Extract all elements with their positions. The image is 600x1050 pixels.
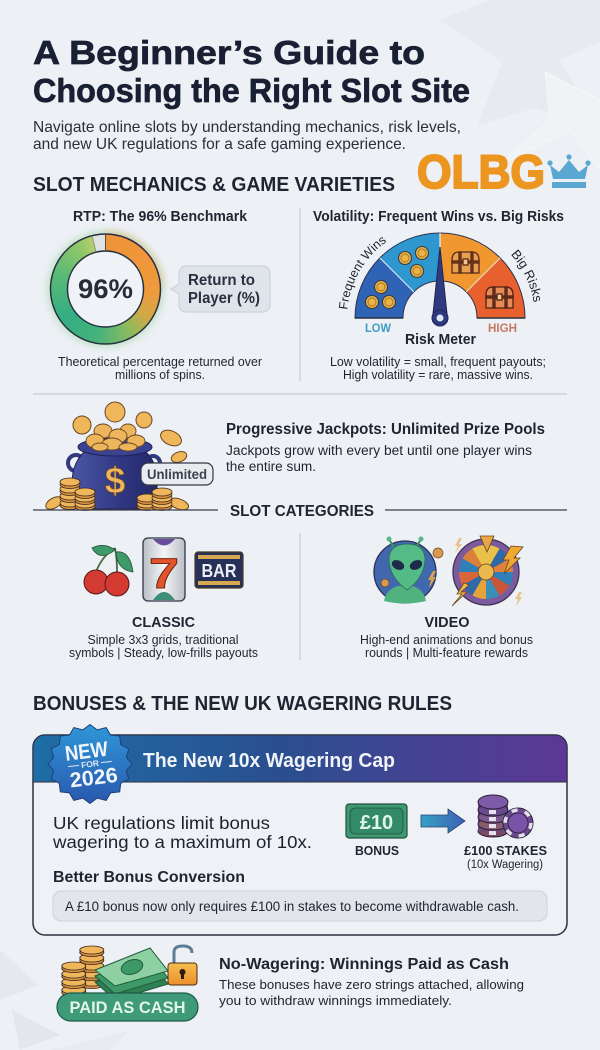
panel: wagering cap card <box>33 725 567 935</box>
video description: High-end animations and bonus <box>360 633 533 647</box>
icon: prize wheel <box>452 536 523 606</box>
regulation text: wagering to a maximum of 10x. <box>52 832 312 852</box>
subtitle <box>33 119 461 153</box>
banknotes <box>95 948 168 1000</box>
icon: coins low <box>366 280 396 308</box>
label: £100 stakes: £100 STAKES <box>464 843 547 858</box>
icon: coins medium <box>398 246 428 278</box>
panel: classic <box>69 538 258 660</box>
arrow <box>421 809 465 833</box>
icon: reel seven <box>143 538 185 601</box>
icon: bar: BAR <box>202 561 236 581</box>
title <box>33 34 470 109</box>
icon: £10 note: £10 <box>360 812 393 834</box>
RTP heading: RTP: The 96% Benchmark <box>73 208 248 225</box>
pot handles <box>68 455 160 471</box>
label: £100 stakes: (10x Wagering) <box>467 859 543 871</box>
card heading: The New 10x Wagering Cap <box>143 750 395 772</box>
badge: new for 2026: FOR <box>80 758 100 770</box>
callout: conversion example: A £10 bonus now only requires £100 in stakes to become withdrawable cash. <box>65 899 519 914</box>
title: Choosing the Right Slot Site <box>33 72 470 109</box>
badge: unlimited <box>141 463 213 485</box>
heading: slot categories: SLOT CATEGORIES <box>230 503 374 520</box>
icon: chest big <box>486 287 513 308</box>
icon: reel seven: 7 <box>149 550 179 598</box>
flying coins <box>44 402 190 512</box>
panel: volatility <box>313 208 564 382</box>
coin pile <box>86 424 145 451</box>
section heading: slot mechanics: SLOT MECHANICS & GAME VARIETIES <box>33 174 395 196</box>
icon: bar <box>195 552 243 588</box>
badge: new for 2026: NEW <box>64 738 109 766</box>
panel: video <box>360 536 533 660</box>
icon: chest <box>452 252 479 273</box>
classic label: CLASSIC <box>132 614 195 631</box>
pot body <box>72 452 158 509</box>
RTP description <box>58 355 262 382</box>
RTP description: millions of spins. <box>115 368 205 382</box>
callout: return to player <box>171 266 270 312</box>
classic description: Simple 3x3 grids, traditional <box>88 633 238 647</box>
badge: new for 2026: 2026 <box>69 764 119 792</box>
label: big risks: Big Risks <box>511 249 540 302</box>
regulation text: UK regulations limit bonus <box>53 813 270 833</box>
callout: conversion example <box>53 891 547 921</box>
pill label <box>57 993 198 1021</box>
volatility description: High volatility = rare, massive wins. <box>343 368 533 382</box>
panel: progressive jackpots <box>226 421 545 474</box>
panel: progressive jackpots: the entire sum. <box>226 459 316 474</box>
coin stacks <box>80 946 104 988</box>
OLBG logo: OLBG <box>417 145 545 198</box>
subtitle: Navigate online slots by understanding mechanics, risk levels, <box>33 119 461 136</box>
coin stacks <box>60 478 172 510</box>
donut chart: 96%: 96% <box>78 274 133 304</box>
video label: VIDEO <box>424 614 470 631</box>
panel: progressive jackpots: Jackpots grow with every bet until one player wins <box>226 443 532 458</box>
volatility description <box>330 355 546 382</box>
label: high: HIGH <box>488 321 517 335</box>
volatility heading: Volatility: Frequent Wins vs. Big Risks <box>313 208 564 225</box>
classic description: symbols | Steady, low-frills payouts <box>69 646 258 660</box>
icon: alien <box>374 536 443 604</box>
panel: no-wagering: you to withdraw winnings immediately. <box>219 993 452 1008</box>
callout: return to player: Player (%) <box>188 290 260 307</box>
icon: pot of gold <box>44 402 213 512</box>
gauge: risk meter <box>338 232 540 348</box>
panel: no-wagering: No-Wagering: Winnings Paid as Cash <box>219 956 509 973</box>
label: bonus: BONUS <box>355 843 399 858</box>
volatility description: Low volatility = small, frequent payouts; <box>330 355 546 369</box>
card header <box>33 735 567 782</box>
donut chart: 96% <box>50 234 160 344</box>
icon: cherries <box>84 545 133 596</box>
icon: crown <box>547 154 591 188</box>
icon: paid as cash <box>57 946 198 1021</box>
subtitle: and new UK regulations for a safe gaming experience. <box>33 136 406 153</box>
panel: progressive jackpots: Progressive Jackpots: Unlimited Prize Pools <box>226 421 545 438</box>
callout: return to player: Return to <box>188 272 255 289</box>
panel: no-wagering: These bonuses have zero strings attached, allowing <box>219 977 524 992</box>
badge: new for 2026 <box>48 725 132 803</box>
panel: RTP <box>50 208 270 382</box>
dollar sign: $ <box>105 460 126 501</box>
RTP description: Theoretical percentage returned over <box>58 355 262 369</box>
subheading: better bonus conversion: Better Bonus Conversion <box>53 869 245 886</box>
regulation text <box>52 813 312 852</box>
badge: unlimited: Unlimited <box>147 467 207 482</box>
padlock <box>168 946 197 985</box>
label: risk meter: Risk Meter <box>405 332 476 348</box>
classic description <box>69 633 258 660</box>
label: £100 stakes <box>464 843 547 871</box>
video description <box>360 633 533 660</box>
label: frequent wins: Frequent Wins <box>338 237 386 309</box>
icon: casino chips <box>478 795 533 838</box>
video description: rounds | Multi-feature rewards <box>365 646 528 660</box>
section heading: bonuses: BONUSES & THE NEW UK WAGERING RULES <box>33 693 452 715</box>
label: low: LOW <box>365 321 392 335</box>
icon: £10 note <box>346 804 407 838</box>
title: A Beginner’s Guide to <box>33 34 425 71</box>
pill label: PAID AS CASH <box>70 998 186 1017</box>
panel: no-wagering <box>219 956 524 1008</box>
needle <box>432 247 448 326</box>
